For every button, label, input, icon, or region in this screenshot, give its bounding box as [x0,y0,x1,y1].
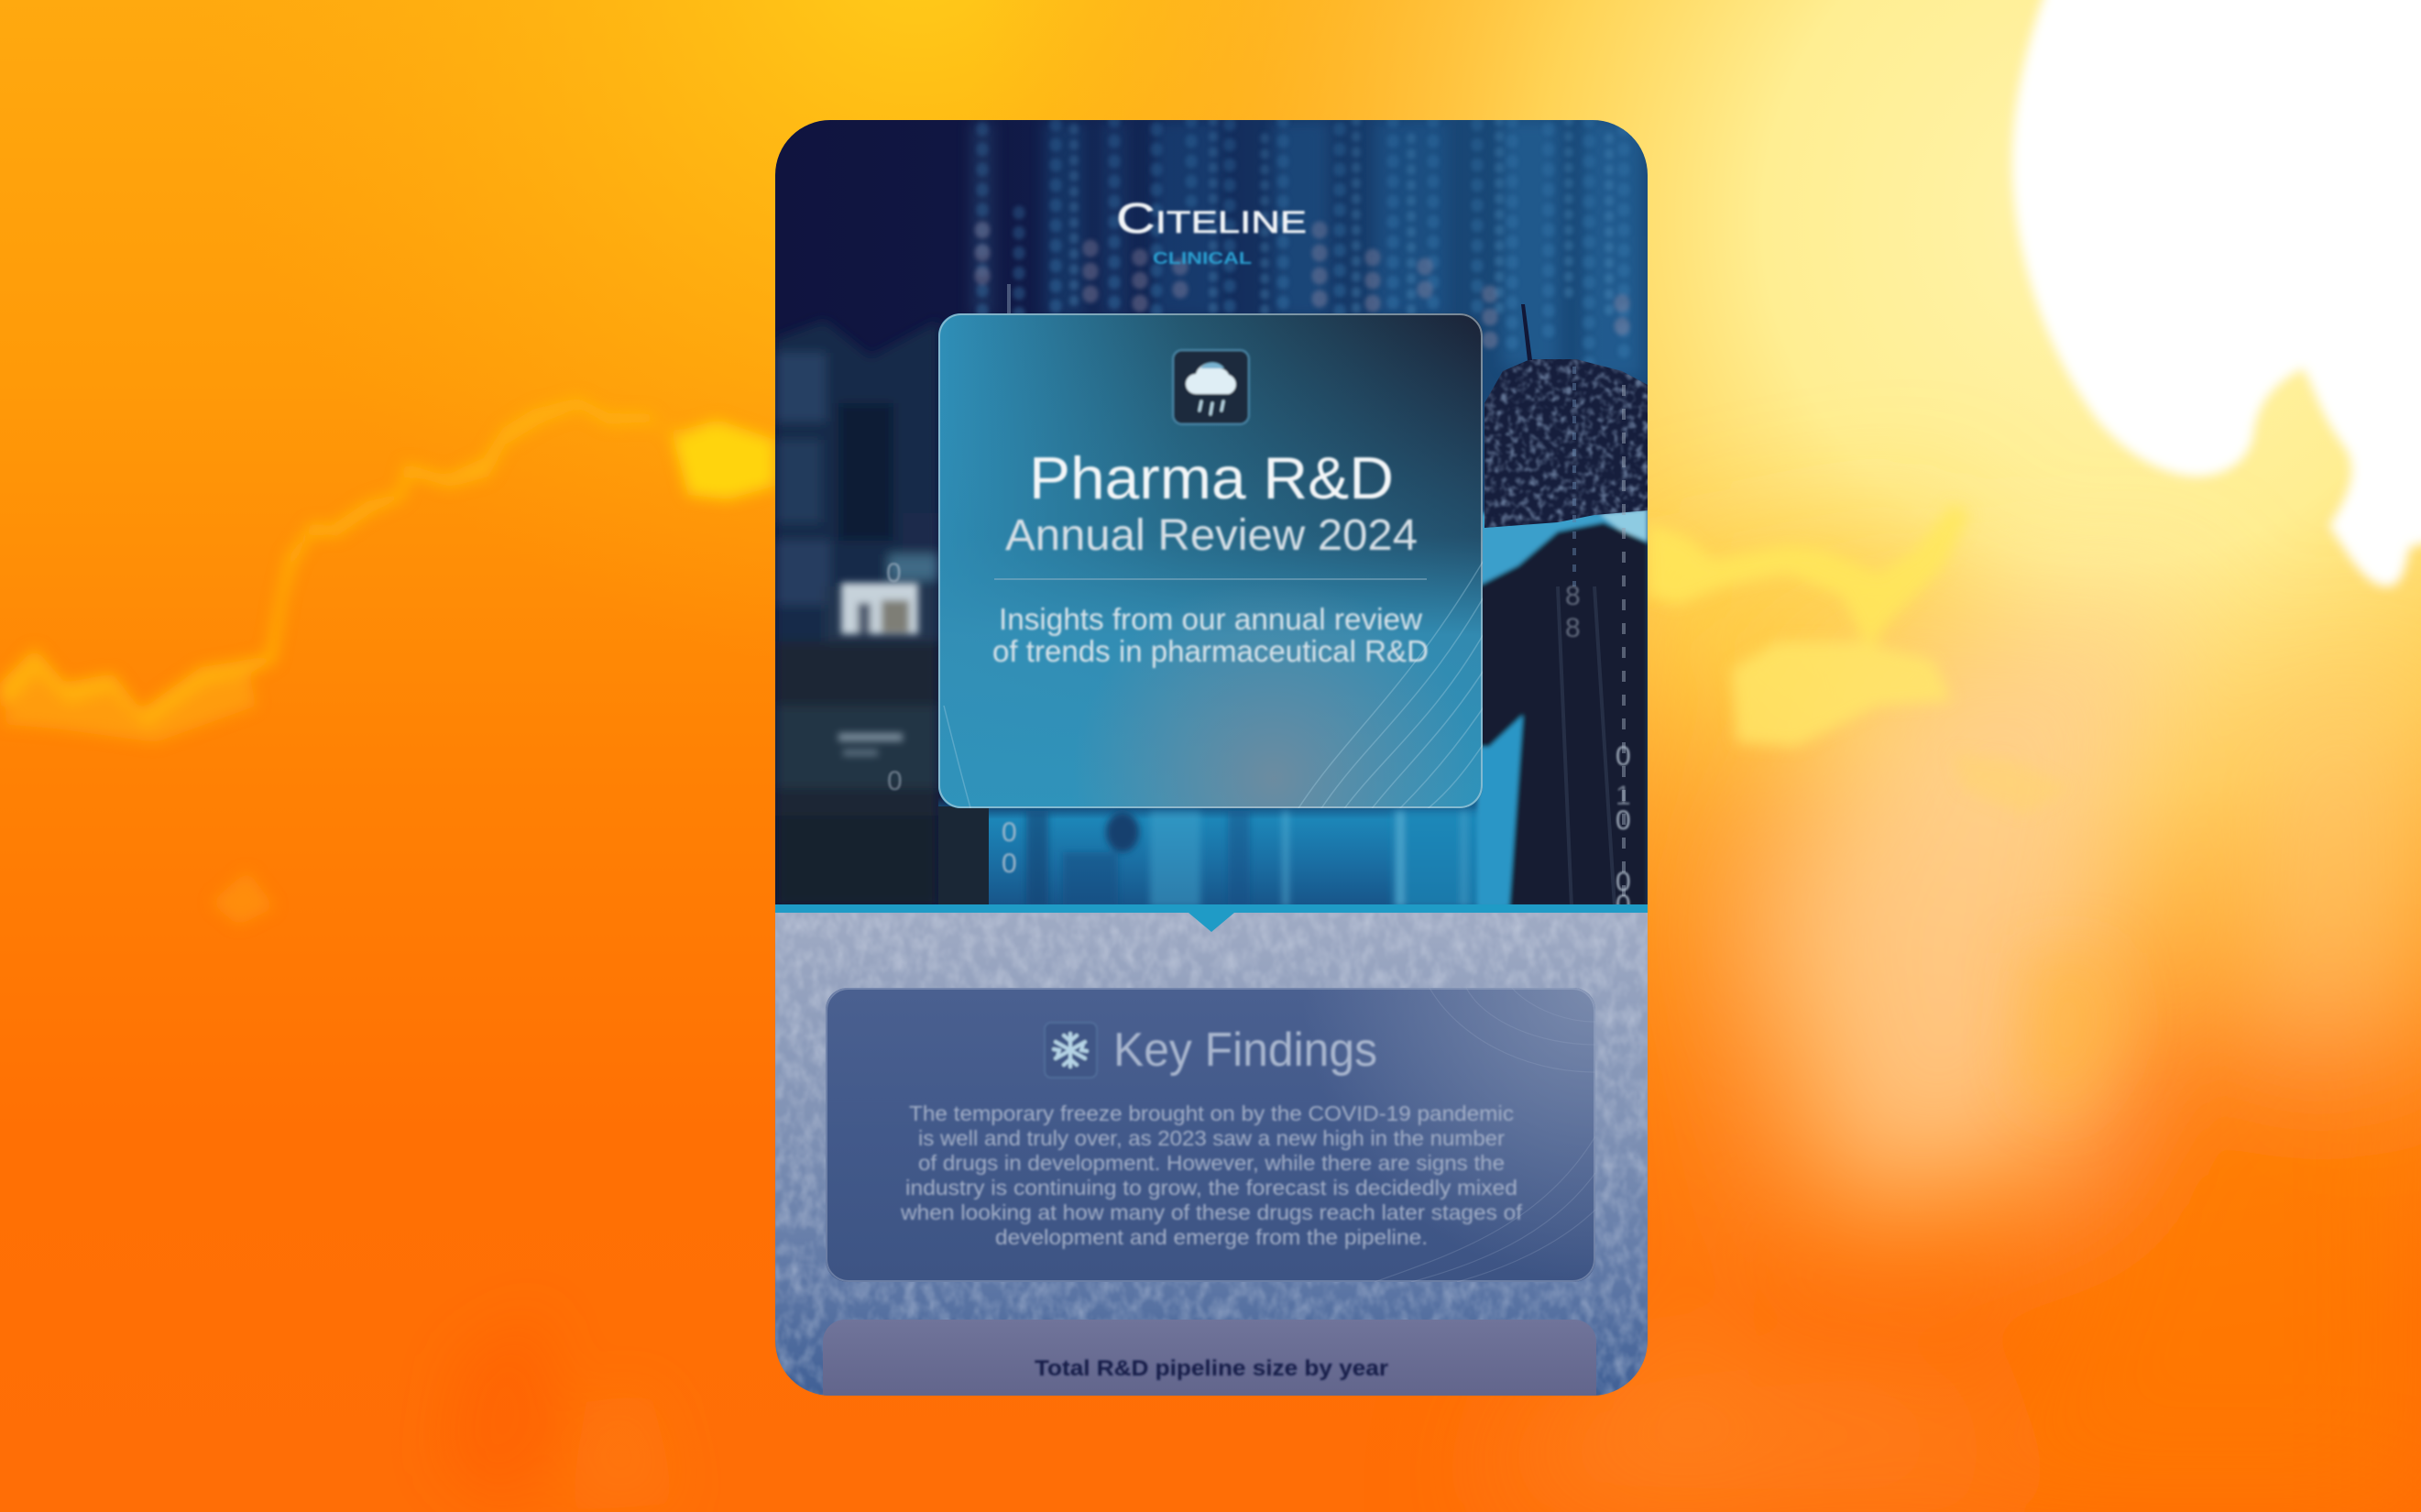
binary digits: 0 [1616,741,1631,772]
pipeline chart panel [823,1320,1596,1396]
contour lines [944,559,1484,811]
frosted section [775,913,1648,1398]
body copy: development and emerge from the pipeline. [995,1225,1428,1249]
divider [994,578,1427,580]
body copy: of drugs in development. However, while there are signs the [918,1151,1505,1175]
cloud edge glow left [0,397,775,926]
intro text [992,602,1429,668]
glow columns [971,120,1640,377]
light shaft [1484,513,2421,1512]
heading: Key Findings [1113,1024,1377,1077]
street glow [938,797,1506,907]
binary digits: 0 [1002,817,1017,848]
binary digits: 0 [1616,890,1631,920]
logo: C ITELINE [1116,194,1307,242]
icon: rain cloud [1173,350,1249,424]
cloud highlights right [1648,504,2071,816]
binary digits: 0 [1616,805,1631,836]
binary digits: 8 [1565,613,1581,643]
binary digits: 0 [887,766,903,796]
intro text: Insights from our annual review [999,602,1422,636]
darker clouds lower left [440,1310,678,1512]
pointer triangle [1189,913,1234,932]
logo [1116,194,1307,268]
accent bar [775,904,1648,913]
shop light [838,583,918,756]
hero image [775,120,1651,920]
digital rain [982,120,1624,367]
logo: CLINICAL [1153,249,1252,268]
binary digits: 0 [1002,849,1017,879]
person with umbrella [1477,304,1651,907]
body copy: when looking at how many of these drugs reach later stages of [900,1200,1523,1224]
report card [775,120,1651,1398]
binary digits [886,558,1631,920]
sun [2012,0,2421,586]
title panel [938,313,1484,811]
heading: Pharma R&D [1029,444,1394,511]
subheading: Annual Review 2024 [1005,511,1418,560]
binary digits: 1 [1616,781,1631,811]
chart title: Total R&D pipeline size by year [1035,1356,1388,1381]
binary digits: 0 [886,558,902,588]
body copy: is well and truly over, as 2023 saw a new high in the number [918,1126,1505,1150]
binary digits: 8 [1565,581,1581,611]
body copy: industry is continuing to grow, the forecast is decidedly mixed [905,1176,1517,1200]
intro text: of trends in pharmaceutical R&D [992,634,1429,668]
icon: snowflake [1045,1023,1097,1078]
key findings panel [826,988,1595,1282]
glow patch [2016,953,2126,1118]
body copy [900,1101,1523,1249]
binary digits: 0 [1616,867,1631,897]
body copy: The temporary freeze brought on by the COVID-19 pandemic [909,1101,1514,1125]
left building [775,321,939,907]
